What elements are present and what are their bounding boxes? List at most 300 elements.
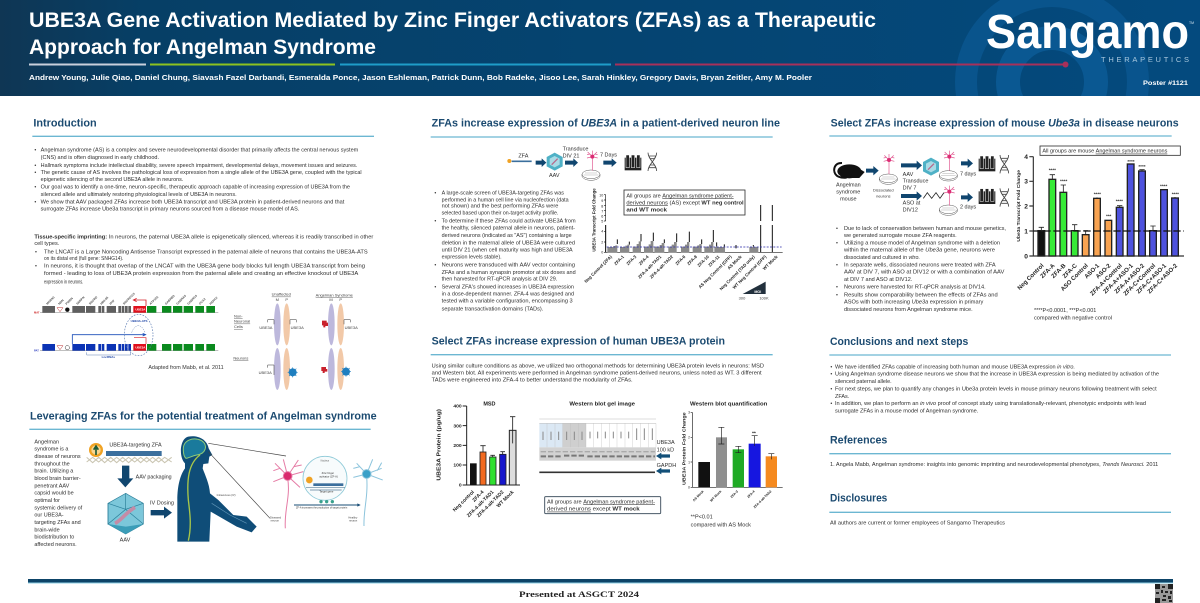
- text block: tissue-specific imprinting: The LNCAT is a Large Noncoding Antisense Transcript expressed in the paternal allele of neurons that contains the UBE3A-ATS: [44, 249, 368, 255]
- icon: UBE3A-targeting ZFA: UBE3A-targeting ZFA: [109, 443, 162, 449]
- text block: rationale: [34, 439, 83, 548]
- bar chart: UBE3A transcript fold change: ZFA-4-alt-TAD2: [649, 254, 674, 280]
- bar chart: Ube3a transcript fold change: ****: [1138, 164, 1146, 169]
- bar chart: UBE3A transcript fold change: 8: [601, 204, 603, 208]
- bar chart: Ube3a transcript fold change: ASO Control: [1060, 263, 1090, 293]
- gene map: maternal and paternal alleles: SNORD: [88, 295, 99, 306]
- conference note: Presented at ASGCT 2024: [519, 589, 640, 599]
- title: UBE3A Gene Activation Mediated by Zinc Finger Activators (ZFAs) as a Therapeutic: [29, 8, 876, 32]
- text block: tissue-specific imprinting: In neurons, it is thought that overlap of the LNCAT with the UBE3A gene body blocks full length UBE3A transcript from being: [44, 264, 365, 270]
- text block: rationale: syndrome is a: [34, 447, 69, 453]
- bar chart: western blot quantification: 0: [688, 486, 690, 490]
- text block: conclusions: We have identified ZFAs capable of increasing both human and mouse UBE3A expression in vitro.: [835, 364, 1075, 370]
- bar chart: UBE3A transcript fold change: ZFA-11: [707, 254, 721, 268]
- text block: rationale: disease of neurons: [34, 454, 81, 460]
- text block: introduction bullets: •: [34, 199, 36, 205]
- text block: tissue-specific imprinting: [34, 234, 374, 285]
- text block: neuron line bullets: expression levels stable).: [442, 255, 502, 261]
- gene map: maternal and paternal alleles: MKRN3: [45, 295, 56, 306]
- text block: rationale: optimal for: [34, 498, 60, 504]
- text block: mouse bullets: Due to lack of conservation between human and mouse genetics,: [844, 226, 1006, 232]
- bar chart: western blot quantification: 2: [688, 436, 690, 440]
- text block: neuron line bullets: •: [434, 285, 436, 291]
- gene map: maternal and paternal alleles: UBE3A: [135, 308, 146, 312]
- text block: reference: 1. Angela Mabb, Angelman syndrome: insights into genomic imprinting and neurodevelopmental phenotypes, Trends Neurosci. 2011: [830, 462, 1158, 468]
- label: IV dosing: IV Dosing: [150, 501, 174, 507]
- text block: neuron line bullets: selected based upon their on-target activity profile.: [442, 211, 559, 217]
- note: significance: compared with negative control: [1034, 316, 1112, 322]
- text block: mouse bullets: In separate wells, dissociated neurons were treated with ZFA: [844, 263, 996, 269]
- text block: conclusions: •: [830, 364, 832, 370]
- gene map: maternal and paternal alleles: GABRB3: [164, 294, 176, 306]
- arrow: IV dosing: [151, 507, 172, 519]
- text block: mouse bullets: Results show comparability between the effects of ZFAs and: [844, 292, 998, 298]
- text block: introduction bullets: silenced allele and ultimately restoring physiological levels of UBE3A in neurons.: [41, 192, 237, 198]
- header banner: [0, 0, 1200, 96]
- bar chart: western blot quantification: ZFA-4: [746, 489, 756, 499]
- gene map: maternal and paternal alleles: GABRA5: [175, 294, 187, 306]
- panel: leveraging ZFAs: [29, 410, 383, 548]
- workflow schematic: [507, 146, 657, 180]
- chromosome diagram: Neurons: [233, 355, 248, 360]
- panel: mouse Ube3a: [829, 118, 1179, 313]
- chromosome diagram: Unaffected: [272, 292, 291, 297]
- text block: mouse bullets: •: [836, 292, 838, 298]
- bar chart: Ube3a transcript fold change: ****: [1116, 199, 1123, 204]
- icon: pink neuron: [273, 459, 303, 528]
- text block: rationale: our UBE3A-: [34, 513, 64, 519]
- bar chart: UBE3A transcript fold change: 9: [601, 199, 603, 203]
- target protein arrow: ZF-A increases the production of target protein: [296, 506, 348, 509]
- bar chart: UBE3A transcript fold change: MOI: [754, 290, 761, 294]
- panel: introduction: [32, 118, 374, 285]
- gene map: maternal and paternal alleles: IPW: [109, 299, 115, 306]
- gene map: maternal and paternal alleles: LncRNAs: [102, 355, 115, 359]
- bar chart: western blot quantification: **: [752, 431, 756, 437]
- text block: introduction bullets: Angelman syndrome (AS) is a complex and severe neurodevelopmental disorder that primarily affects the central nervous system: [41, 148, 359, 154]
- bar chart: Ube3a transcript fold change: ZFA-C+ASO-2: [1147, 263, 1180, 295]
- bar chart: MSD: Neg control: [452, 489, 476, 513]
- bar chart: UBE3A transcript fold change: 10: [599, 194, 603, 198]
- text block: neuron line bullets: separate transactivation domains (TADs).: [442, 307, 544, 313]
- chromosome diagram: Neuronal: [234, 319, 250, 324]
- callout: all groups: and WT mock: [626, 207, 668, 213]
- text block: mouse bullets: dissociated neurons from Angelman syndrome mice.: [844, 307, 973, 313]
- bar chart: UBE3A transcript fold change: ZFA-4-alt-TAD1: [637, 254, 663, 280]
- bar chart: western blot quantification: [682, 402, 783, 509]
- chromosome diagram: UBE3A: [259, 370, 272, 375]
- bar chart: MSD: 100: [453, 463, 462, 469]
- text block: introduction bullets: •: [34, 185, 36, 191]
- text block: conclusions: surrogate ZFAs in a mouse model of Angelman syndrome.: [835, 408, 979, 414]
- bar chart: UBE3A transcript fold change: 5: [601, 219, 603, 223]
- text block: disclosure: All authors are current or former employees of Sangamo Therapeutics: [830, 520, 1005, 526]
- bar chart: Ube3a transcript fold change: ZFA-C+Control: [1123, 263, 1157, 297]
- bar chart: Ube3a transcript fold change: 3: [1024, 179, 1028, 186]
- heading: introduction: Introduction: [33, 118, 97, 130]
- header coloured rule: [29, 62, 1068, 68]
- text block: tissue-specific imprinting: on its distal end (full gene: SNHG14).: [44, 256, 124, 262]
- chromosome diagram: P: [339, 297, 342, 302]
- title: Approach for Angelman Syndrome: [29, 35, 376, 59]
- text block: mouse bullets: [836, 226, 1006, 313]
- gene map: maternal and paternal alleles: UBE3A: [135, 346, 146, 350]
- human figure: [177, 436, 257, 542]
- bar chart: UBE3A transcript fold change: UBE3A Transcript Fold Change: [591, 188, 596, 252]
- bar chart: Ube3a transcript fold change: ZFA-A+Control: [1090, 263, 1124, 297]
- text block: conclusions: •: [830, 372, 832, 378]
- icon: UBE3A-targeting ZFA: [87, 443, 172, 463]
- bar chart: UBE3A transcript fold change: 0: [601, 251, 603, 255]
- bar chart: UBE3A transcript fold change: 2: [601, 240, 603, 244]
- text block: neuron line bullets: the healthy, silenced paternal allele in neurons, patient-: [442, 225, 575, 231]
- note: significance: compared with AS Mock: [691, 522, 751, 528]
- text block: neuron line bullets: Several ZFA's showed increases in UBE3A expression: [442, 285, 574, 291]
- text block: conclusions: •: [830, 401, 832, 407]
- label: AAV packaging: AAV packaging: [136, 474, 172, 480]
- text block: tissue-specific imprinting: Tissue-specific imprinting: In neurons, the paternal UBE3A allele is epigenetically silenced, whereas it is readily transcribed in other: [34, 234, 374, 240]
- heading: leveraging ZFAs: Leveraging ZFAs for the potential treatment of Angelman syndrome: [30, 410, 377, 422]
- labels: neuron captions: neuron: [271, 519, 279, 523]
- bar chart: UBE3A transcript fold change: ZFA-8: [686, 254, 698, 266]
- labels: neuron captions: Healthy: [348, 515, 358, 519]
- bar chart: MSD: 300: [453, 423, 462, 429]
- gene map: maternal and paternal alleles: HBII-85: [99, 295, 110, 306]
- text block: neuron line bullets: •: [434, 263, 436, 269]
- text block: introduction bullets: •: [34, 148, 36, 154]
- bar chart: western blot quantification: ZFA-4-alt-TAD2: [753, 489, 772, 509]
- western blot gel image: Western blot gel image: [569, 402, 635, 408]
- text block: neuron line bullets: tested with a variable configuration, encompassing 3: [442, 299, 573, 305]
- text block: tissue-specific imprinting: •: [35, 249, 37, 255]
- text block: mouse bullets: dissociated and cultured in vitro.: [844, 255, 920, 261]
- labels: neuron captions: Diseased: [270, 515, 282, 519]
- mouse workflow schematic: ASO at: [903, 201, 921, 207]
- bar chart: Ube3a transcript fold change: ZFA-C: [1062, 263, 1079, 280]
- text block: neuron line bullets: derived neurons (indicated as "AS") containing a large: [442, 233, 572, 239]
- bar chart: Ube3a transcript fold change: 1: [1024, 228, 1028, 235]
- zoomed target gene circle: Nucleus: [321, 460, 330, 462]
- note: significance: **P<0.01: [691, 515, 713, 521]
- bar chart: UBE3A transcript fold change: AS Mock: [726, 254, 743, 271]
- chromosome diagram: [233, 292, 358, 390]
- text block: mouse bullets: within the maternal allele of the Ube3a gene, neurons were: [843, 248, 995, 254]
- text block: introduction bullets: The genetic cause of AS involves the pathological loss of expression from a single allele of the UBE3A gene, coupled with the typical: [41, 170, 362, 176]
- gene map: maternal and paternal alleles: HERC2: [209, 295, 219, 306]
- mouse workflow schematic: 2 days: [960, 205, 976, 211]
- bar chart: Ube3a transcript fold change: 4: [1024, 154, 1028, 161]
- text block: tissue-specific imprinting: •: [35, 264, 37, 270]
- callout: except WT mock: derived neurons except WT mock: [547, 507, 641, 513]
- workflow schematic: ZFA: [518, 153, 529, 159]
- chromosome diagram: UBE3A: [259, 325, 273, 330]
- bar chart: Ube3a transcript fold change: ZFA-A+ASO-1: [1103, 263, 1135, 295]
- chromosome diagram: M: [276, 297, 279, 302]
- text block: protein methods: [432, 363, 764, 384]
- citation: Adapted from Mabb, et al. 2011: [148, 365, 224, 371]
- text block: rationale: Angelman: [34, 439, 59, 445]
- workflow schematic: DIV 21: [563, 153, 579, 159]
- text block: neuron line bullets: ZFAs and a human synapsin promotor at six doses and: [442, 270, 576, 276]
- bar chart: Ube3a transcript fold change: ****: [1172, 191, 1179, 196]
- bar chart: western blot quantification: WT Mock: [709, 489, 722, 503]
- bar chart: western blot quantification: AS Mock: [692, 489, 705, 502]
- text block: neuron line bullets: until DIV 21 (when cell maturity was high and UBE3A: [442, 248, 573, 254]
- text block: conclusions: [830, 364, 1159, 414]
- zoomed target gene circle: Target gene: [319, 490, 334, 494]
- gene map: maternal and paternal alleles: ATP10A: [149, 294, 160, 306]
- heading: references: References: [830, 434, 887, 446]
- bar chart: UBE3A transcript fold change: Neg Control (ZFA): [583, 254, 613, 284]
- gene map: maternal and paternal alleles: GABRG3: [186, 294, 198, 306]
- text block: mouse bullets: •: [836, 226, 838, 232]
- gene map: maternal and paternal alleles: [34, 292, 219, 359]
- text block: conclusions: •: [830, 387, 832, 393]
- text block: conclusions: silenced paternal allele.: [835, 379, 892, 385]
- mouse workflow schematic: mouse: [840, 197, 857, 203]
- panel: ZFAs increase UBE3A expression: [431, 118, 783, 313]
- bar chart: Ube3a transcript fold change: 0: [1024, 253, 1028, 260]
- labels: neuron captions: Intravenous (IV): [217, 493, 236, 497]
- text block: introduction bullets: [34, 148, 362, 213]
- text block: introduction bullets: We show that AAV packaged ZFAs increase both UBE3A transcript and UBE3A protein in patient-derived neurons and that: [41, 199, 345, 205]
- bar chart: MSD: UBE3A Protein (pg/ug): [437, 409, 443, 481]
- callout: mouse neurons: All groups are mouse Angelman syndrome neurons: [1042, 149, 1168, 155]
- chromosome diagram: P: [285, 297, 288, 302]
- mouse workflow schematic: AAV: [903, 172, 914, 178]
- text block: tissue-specific imprinting: expression in neurons.: [44, 279, 84, 285]
- text block: protein methods: TADs were engineered into ZFA-4 to better understand the modularity of ZFAs.: [432, 378, 633, 384]
- text block: rationale: targeting ZFAs and: [34, 520, 81, 526]
- text block: rationale: blood brain barrier-: [34, 476, 81, 482]
- footer: [28, 579, 1173, 603]
- western blot gel image: [539, 402, 676, 474]
- target protein arrow: [294, 500, 361, 509]
- zoomed target gene circle: [303, 456, 347, 500]
- bar chart: MSD: ZFA-4-alt-TAD2: [476, 489, 506, 519]
- text block: rationale: brain. Utilizing a: [34, 469, 74, 475]
- authors: Andrew Young, Julie Qiao, Daniel Chung, Siavash Fazel Darbandi, Esmeralda Ponce, Jason Eshleman, Patrick Dunn, Bob Radeke, Jisoo Lee, Sarah Hinkley, Gregory Davis, Bryan Zeitler, Amy M. Pooler: [29, 73, 812, 82]
- bar chart: UBE3A transcript fold change: AS Neg Control (GFP): [697, 254, 733, 290]
- note: significance: [691, 515, 751, 528]
- bar chart: UBE3A transcript fold change: ZFA-4: [638, 254, 650, 266]
- text block: mouse bullets: ASOs with both increasing Ube3a expression in primary: [844, 300, 984, 306]
- bar chart: Ube3a transcript fold change: ZFA-A+ASO-2: [1114, 263, 1147, 295]
- icon: QR code: [1155, 584, 1173, 603]
- text block: rationale: throughout the: [34, 461, 70, 467]
- bar chart: MSD: 400: [453, 404, 462, 410]
- text block: mouse bullets: Neurons were harvested for RT-qPCR analysis at DIV14.: [844, 285, 986, 291]
- text block: mouse bullets: •: [836, 285, 838, 291]
- poster number: Poster #1121: [1143, 80, 1189, 87]
- bar chart: MSD: [437, 402, 520, 519]
- bar chart: Ube3a transcript fold change: ****: [1160, 184, 1167, 189]
- bar chart: MSD: 0: [459, 483, 462, 489]
- gene map: maternal and paternal alleles: SNRPN: [75, 295, 85, 306]
- chromosome diagram: Angelman Syndrome: [316, 292, 354, 297]
- bar chart: Ube3a transcript fold change: ASO-1: [1084, 263, 1102, 280]
- chromosome diagram: Non-: [234, 313, 243, 318]
- gene map: maternal and paternal alleles: PAT: [34, 348, 39, 352]
- leader lines: [208, 443, 286, 518]
- title: [29, 8, 876, 59]
- mouse workflow schematic: 7 days: [960, 172, 976, 178]
- label: AAV: AAV: [120, 537, 131, 543]
- bar chart: Ube3a transcript fold change: ZFA-A: [1040, 263, 1057, 280]
- text block: tissue-specific imprinting: formed - leading to loss of UBE3A protein expression from the paternal allele and creating an effective knockout of UBE3A: [44, 271, 359, 277]
- mouse workflow schematic: Transduce: [903, 179, 928, 185]
- bar chart: western blot quantification: 1: [688, 460, 690, 464]
- icon: AAV capsid: [108, 493, 143, 534]
- text block: mouse bullets: •: [836, 263, 838, 269]
- gene map: maternal and paternal alleles: MAT: [34, 310, 40, 314]
- zoomed target gene circle: Zinc finger: [322, 471, 334, 475]
- text block: protein methods: Using similar culture conditions as above, we utilized two orthogonal methods for determining UBE3A protein levels in neurons: MSD: [432, 363, 764, 369]
- text block: neuron line bullets: Neurons were transduced with AAV vector containing: [442, 263, 575, 269]
- callout: all groups: [624, 190, 745, 215]
- bar chart: MSD: 200: [453, 443, 462, 449]
- bar chart: western blot quantification: Western blot quantification: [690, 402, 768, 408]
- callout: all groups: All groups are Angelman syndrome patient-: [626, 193, 734, 199]
- text block: introduction bullets: epigenetic silencing of the second UBE3A allele in neurons.: [41, 177, 184, 183]
- workflow schematic: AAV: [549, 173, 560, 179]
- callout: all groups: derived neurons (AS) except WT neg control: [626, 200, 744, 206]
- heading: disclosures: Disclosures: [830, 493, 887, 505]
- heading: mouse: Select ZFAs increase expression of mouse Ube3a in disease neurons: [831, 118, 1179, 130]
- logo: TM: [1189, 21, 1194, 25]
- text block: protein methods: and Western blot. All experiments were performed in Angelman syndrome patient-derived neurons, unless noted as WT. 3 different: [432, 370, 762, 376]
- workflow schematic: Transduce: [563, 146, 588, 152]
- bar chart: Ube3a transcript fold change: [1016, 146, 1184, 322]
- gene map: maternal and paternal alleles: PWRN: [65, 296, 74, 306]
- text block: conclusions: Using Angelman syndrome disease neurons we show that the increase in UBE3A expression is being mediated by activation of the: [835, 372, 1159, 378]
- bar chart: UBE3A transcript fold change: ZFA-6: [674, 254, 687, 266]
- bar chart: UBE3A transcript fold change: ZFA-1: [613, 254, 625, 266]
- text block: rationale: brain-wide: [34, 527, 60, 533]
- bar chart: Ube3a transcript fold change: ASO-2: [1095, 263, 1113, 280]
- bar chart: western blot quantification: ZFA-3: [730, 489, 739, 499]
- text block: conclusions: For next steps, we plan to quantify any changes in Ube3a protein levels in mouse primary neurons following treatment with select: [835, 387, 1157, 393]
- bar chart: Ube3a transcript fold change: ZFA-B: [1051, 263, 1068, 280]
- bar chart: UBE3A transcript fold change: WT Neg Control (GFP): [732, 254, 768, 290]
- text block: mouse bullets: •: [836, 241, 838, 247]
- labels: neuron captions: [217, 493, 358, 523]
- bar chart: Ube3a transcript fold change: Ube3a Transcript Fold Change: [1016, 170, 1021, 242]
- bar chart: Ube3a transcript fold change: ****: [1049, 168, 1056, 173]
- bar chart: UBE3A transcript fold change: WT Mock: [762, 254, 779, 271]
- panel: imprinting diagrams: [34, 292, 358, 390]
- heading: neuron line: ZFAs increase expression of UBE3A in a patient-derived neuron line: [432, 118, 780, 130]
- text block: mouse bullets: Utilizing a mouse model of Angelman syndrome with a deletion: [844, 241, 1000, 247]
- bar chart: Ube3a transcript fold change: ZFA-C+ASO-1: [1136, 263, 1169, 295]
- chromosome diagram: UBE3A: [291, 325, 304, 330]
- text block: mouse bullets: AAV at DIV 7, with ASO at DIV12 or with a combination of AAV: [844, 270, 1005, 276]
- text block: neuron line bullets: performed in a human cell line via nucleofection (data: [442, 198, 570, 204]
- bar chart: UBE3A transcript fold change: 6: [601, 215, 603, 219]
- bar chart: MSD: ZFA-4-alt-TAD1: [466, 489, 496, 519]
- text block: neuron line bullets: in a dose-dependent manner. ZFA-4 was designed and: [442, 292, 574, 298]
- note: significance: ****P<0.0001, ***P<0.001: [1034, 308, 1096, 314]
- gene map: maternal and paternal alleles: UBE3A-ATS: [131, 319, 148, 323]
- text block: conclusions: ZFAs.: [835, 394, 850, 400]
- text block: mouse bullets: at DIV 7 and ASO at DIV12.: [844, 277, 913, 283]
- mouse workflow schematic: Angelman: [836, 183, 861, 189]
- note: significance: [1034, 308, 1112, 322]
- text block: rationale: biodistribution to: [34, 535, 74, 541]
- gene map: maternal and paternal alleles: OCA2: [198, 297, 207, 306]
- text block: introduction bullets: Our goal was to identify a one-time, neuron-specific, therapeutic approach capable of increasing expression of UBE3A from the: [41, 185, 350, 191]
- text block: neuron line bullets: deletion in the maternal allele of UBE3A were cultured: [442, 240, 575, 246]
- panel: conclusions, references and disclosures: [829, 336, 1171, 526]
- text block: rationale: capsid would be: [34, 491, 74, 497]
- callout: except WT mock: All groups are Angelman syndrome patient-: [547, 499, 655, 505]
- text block: introduction bullets: •: [34, 163, 36, 169]
- chromosome diagram: Cells: [234, 324, 243, 329]
- icon: blue neuron: [353, 459, 383, 526]
- mouse workflow schematic: neurons: [876, 193, 891, 198]
- mouse workflow schematic: syndrome: [836, 190, 860, 196]
- bar chart: western blot quantification: 3: [688, 411, 690, 415]
- chromosome diagram: UBE3A: [345, 325, 358, 330]
- mouse workflow schematic: Dissociated: [873, 188, 894, 193]
- arrow: AAV packaging: [117, 466, 133, 487]
- text block: rationale: penetrant AAV: [34, 483, 70, 489]
- gene map: maternal and paternal alleles: SNORD115: [122, 292, 136, 306]
- text block: introduction bullets: surrogate ZFAs increase Ube3a transcript in primary neurons sourced from a disease mouse model of AS.: [41, 207, 300, 213]
- bar chart: Ube3a transcript fold change: ****: [1094, 191, 1101, 196]
- bar chart: UBE3A transcript fold change: [583, 188, 783, 300]
- logo: THERAPEUTICS: [1101, 55, 1189, 64]
- text block: introduction bullets: Hallmark symptoms include intellectual disability, severe speech impairment, developmental delays, movement issues and seizures.: [41, 163, 358, 169]
- labels: neuron captions: neuron: [349, 519, 358, 523]
- text block: neuron line bullets: A large-scale screen of UBE3A-targeting ZFAs was: [442, 191, 564, 197]
- gene map: maternal and paternal alleles: NDN: [57, 298, 65, 306]
- text block: conclusions: In addition, we plan to perform an in vivo proof of concept study using translationally-relevant, phenotypic endpoints with lead: [835, 401, 1146, 407]
- bar chart: UBE3A transcript fold change: 300: [739, 295, 746, 300]
- text block: rationale: systemic delivery of: [34, 505, 83, 511]
- mouse workflow schematic: [834, 151, 1009, 215]
- bar chart: Ube3a transcript fold change: ****: [1060, 178, 1067, 183]
- text block: neuron line bullets: •: [434, 191, 436, 197]
- text block: neuron line bullets: •: [434, 219, 436, 225]
- bar chart: Ube3a transcript fold change: Neg Control: [1017, 263, 1046, 292]
- bar chart: Ube3a transcript fold change: ****: [1127, 159, 1135, 164]
- bar chart: UBE3A transcript fold change: ZFA-3: [625, 254, 638, 266]
- chromosome diagram: M: [329, 297, 333, 302]
- zoomed target gene circle: activator (ZF-A): [319, 474, 338, 478]
- western blot gel image: 100 kD: [657, 447, 674, 453]
- text block: rationale: affected neurons.: [34, 542, 77, 548]
- text block: neuron line bullets: not shown) and the best performing ZFAs were: [442, 204, 558, 210]
- bar chart: UBE3A transcript fold change: 4: [601, 230, 603, 234]
- text block: introduction bullets: •: [34, 170, 36, 176]
- bar chart: UBE3A transcript fold change: ZFA-10: [696, 254, 710, 268]
- mouse workflow schematic: DIV12: [903, 208, 918, 214]
- bar chart: UBE3A transcript fold change: Neg Control (TAD only): [719, 254, 756, 291]
- bar chart: MSD: MSD: [483, 402, 496, 408]
- mouse workflow schematic: DIV 7: [903, 185, 916, 191]
- text block: neuron line bullets: To determine if these ZFAs could activate UBE3A from: [442, 219, 576, 225]
- text block: introduction bullets: (CNS) and is often diagnosed in early childhood.: [41, 155, 159, 161]
- text block: mouse bullets: we generated surrogate mouse ZFA reagents.: [843, 233, 957, 239]
- bar chart: Ube3a transcript fold change: 2: [1024, 203, 1028, 210]
- callout: mouse neurons: [1040, 146, 1180, 155]
- text block: neuron line bullets: then harvested for RT-qPCR analysis at DIV 29.: [442, 277, 558, 283]
- text block: tissue-specific imprinting: cell types.: [34, 241, 60, 247]
- bar chart: western blot quantification: UBE3A Protein Fold Change: [682, 412, 687, 485]
- bar chart: UBE3A transcript fold change: 100K: [759, 295, 769, 300]
- workflow schematic: 7 Days: [600, 153, 617, 159]
